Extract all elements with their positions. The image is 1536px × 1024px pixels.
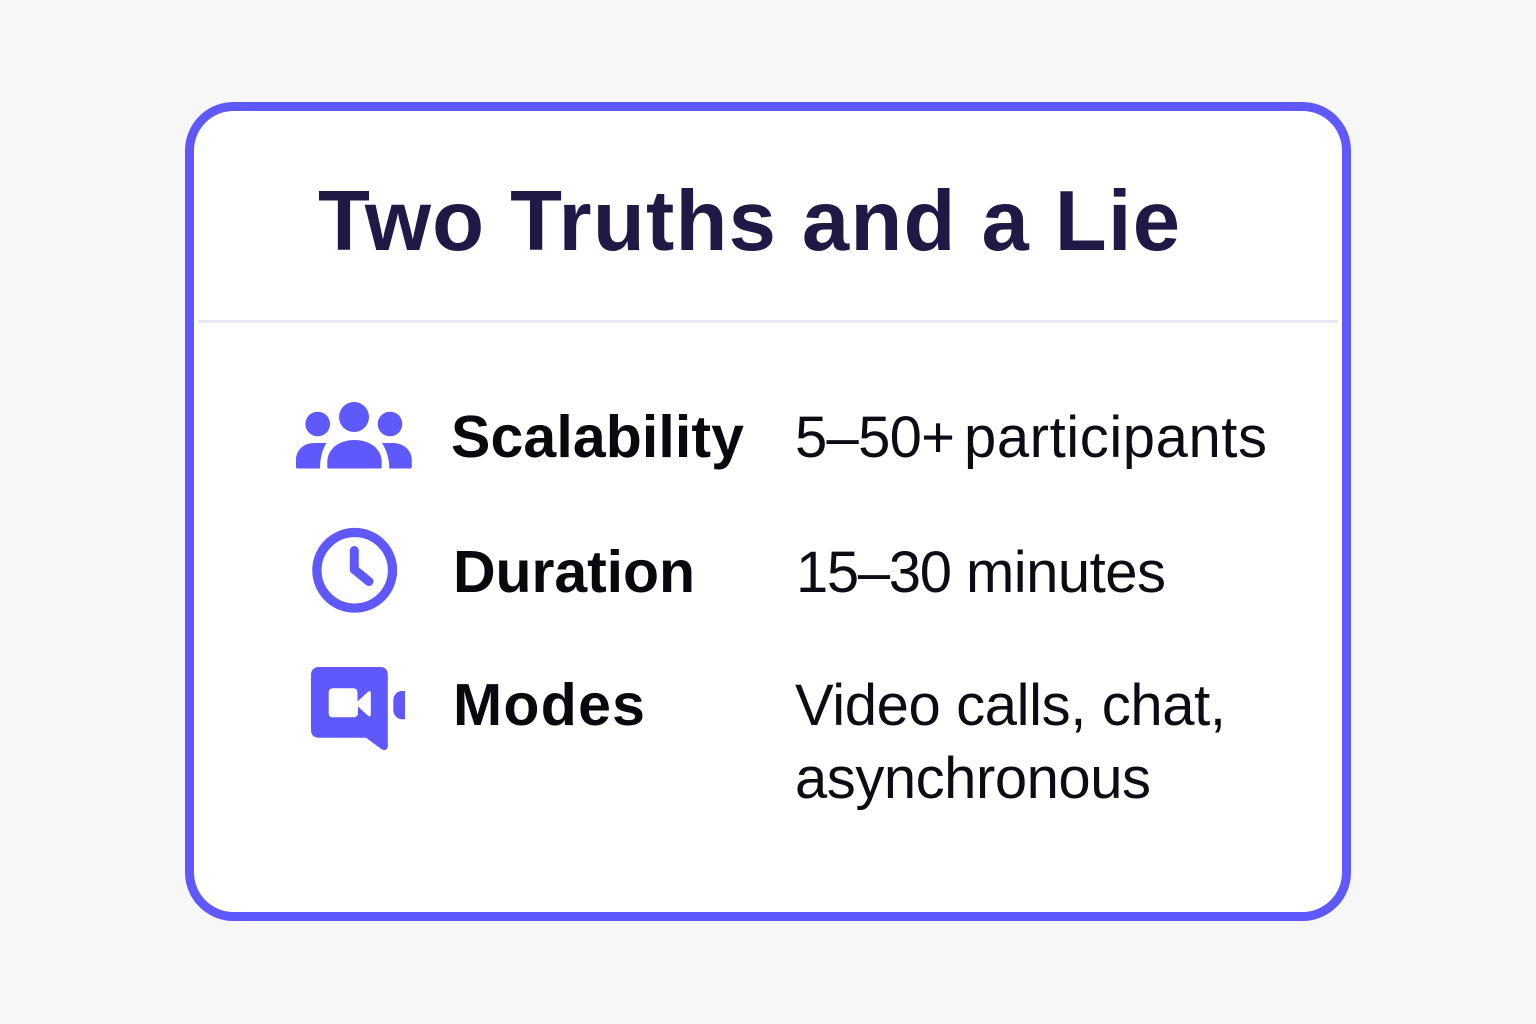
row: duration — [317, 532, 1166, 608]
value: 5–50+ participants: 5–50+ — [795, 405, 955, 470]
value: video calls, chat, asynchronous: Video calls, chat, — [795, 673, 1226, 738]
icon: video call bubble — [311, 667, 405, 750]
icon: clock — [317, 532, 393, 608]
value: 5–50+ participants: participants — [964, 405, 1267, 470]
value: 15–30 minutes — [796, 540, 1166, 605]
value: video calls, chat, asynchronous: asynchronous — [795, 746, 1151, 811]
value: 5–50+ participants — [795, 405, 1267, 470]
icon: group of people — [296, 402, 412, 468]
value: video calls, chat, asynchronous — [795, 673, 1226, 811]
label: Duration: Duration — [453, 539, 695, 605]
title: Two Truths and a Lie — [318, 174, 1180, 269]
value: 15–30 minutes: minutes — [966, 540, 1166, 605]
panel: info card — [190, 106, 1346, 916]
value: 15–30 minutes: 15–30 — [796, 540, 952, 605]
card outline — [190, 106, 1346, 916]
label: Modes: Modes — [453, 672, 645, 738]
row: modes — [311, 667, 1226, 811]
label: Scalability: Scalability — [451, 404, 744, 470]
row: scalability — [296, 402, 1267, 470]
